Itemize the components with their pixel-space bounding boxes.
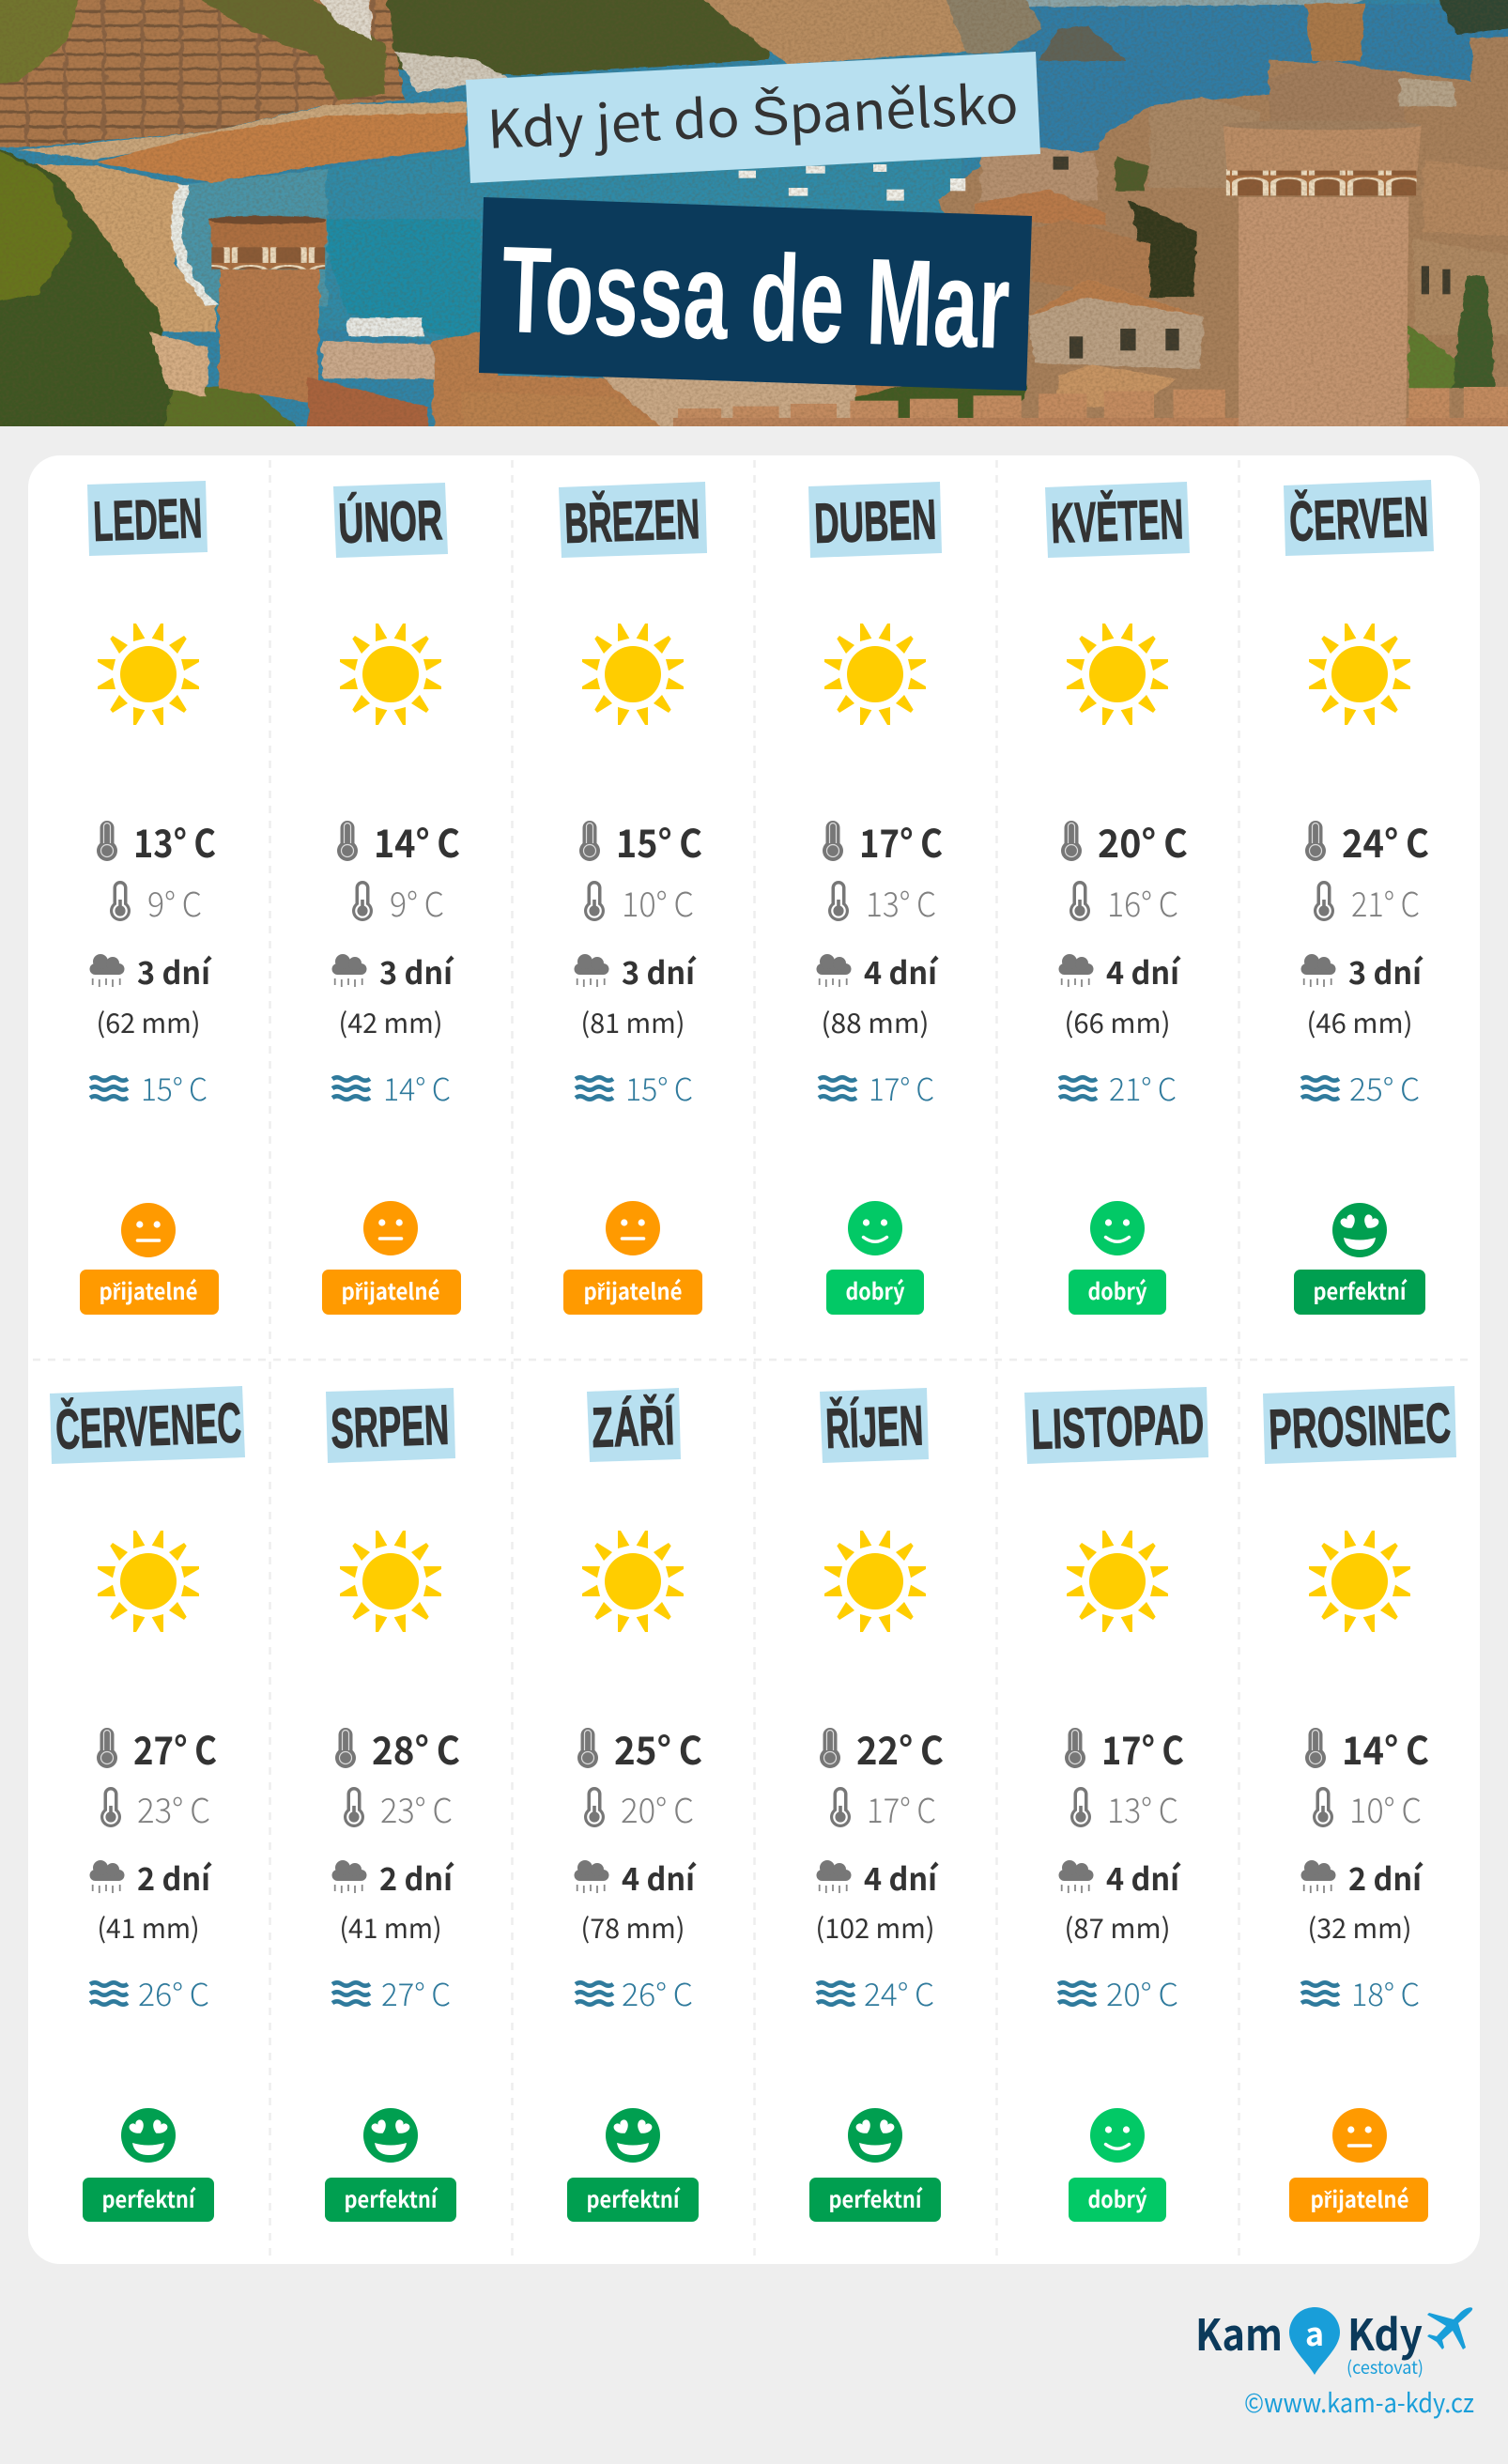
high temperature xyxy=(823,812,943,869)
month: listopad xyxy=(1024,1387,1208,2222)
icon: airplane xyxy=(1427,2307,1472,2349)
rating: dobrý xyxy=(845,1273,905,1306)
rain days: 2 dní xyxy=(1348,1855,1423,1900)
icon: sun xyxy=(1067,624,1168,725)
low temperature: 10° C xyxy=(622,878,694,927)
sea temperature: 14° C xyxy=(383,1065,451,1110)
sea temperature xyxy=(576,1970,693,2015)
rain days xyxy=(332,1855,454,1900)
low temperature xyxy=(584,1784,694,1833)
high temperature: 17° C xyxy=(1101,1719,1184,1776)
rainfall: (87 mm) xyxy=(1065,1907,1170,1947)
month: leden xyxy=(80,481,219,1315)
low temperature: 23° C xyxy=(380,1784,453,1833)
rainfall: (41 mm) xyxy=(340,1907,441,1947)
low temperature xyxy=(584,878,694,927)
sea temperature xyxy=(817,1970,934,2015)
sea temperature: 18° C xyxy=(1351,1970,1420,2015)
rating: perfektní xyxy=(828,2181,923,2214)
rain days xyxy=(1301,948,1423,993)
rainfall: (42 mm) xyxy=(338,1002,443,1041)
month: září xyxy=(567,1388,702,2222)
sea temperature xyxy=(332,1065,451,1110)
rating xyxy=(1069,2108,1166,2222)
rain days: 2 dní xyxy=(379,1855,454,1900)
month title xyxy=(559,482,707,558)
high temperature xyxy=(1305,1719,1429,1776)
rain days: 3 dní xyxy=(137,948,212,993)
month title: LEDEN xyxy=(92,486,203,553)
sea temperature: 15° C xyxy=(141,1065,208,1110)
icon: sun xyxy=(1309,1531,1410,1632)
icon: sun xyxy=(1067,1531,1168,1632)
icon: sun xyxy=(98,624,199,725)
month title xyxy=(808,482,942,558)
rainfall: (102 mm) xyxy=(815,1907,935,1947)
rainfall: (32 mm) xyxy=(1307,1907,1412,1947)
rating xyxy=(1289,2108,1428,2222)
rain days xyxy=(1059,948,1181,993)
rain days xyxy=(332,948,454,993)
rain days xyxy=(90,1855,212,1900)
rainfall: (81 mm) xyxy=(580,1002,685,1041)
logo: Kam a Kdy: (cestovat) xyxy=(1346,2354,1423,2379)
rain days xyxy=(817,1855,939,1900)
month: prosinec xyxy=(1263,1386,1456,2222)
low temperature xyxy=(1314,878,1420,927)
sea temperature xyxy=(90,1970,209,2015)
hero photo of Tossa de Mar xyxy=(0,0,1508,439)
icon: sun xyxy=(824,1531,926,1632)
rainfall: (46 mm) xyxy=(1307,1002,1412,1041)
high temperature xyxy=(579,812,702,869)
icon: sun xyxy=(582,1531,684,1632)
rain days: 4 dní xyxy=(1106,1855,1181,1900)
month: duben xyxy=(808,482,943,1315)
rain days xyxy=(575,1855,697,1900)
rating xyxy=(1294,1203,1425,1315)
rating: přijatelné xyxy=(584,1273,682,1306)
high temperature: 14° C xyxy=(1342,1719,1429,1776)
icon: sun xyxy=(582,624,684,725)
sea temperature xyxy=(1058,1970,1178,2015)
low temperature xyxy=(110,878,202,927)
low temperature: 16° C xyxy=(1107,878,1178,927)
rating xyxy=(826,1201,924,1315)
rain days xyxy=(1059,1855,1181,1900)
low temperature xyxy=(1069,878,1178,927)
icon: sun xyxy=(824,624,926,725)
logo: Kam a Kdy xyxy=(1195,2302,1472,2379)
high temperature xyxy=(1305,812,1429,869)
rainfall: (62 mm) xyxy=(96,1002,201,1041)
low temperature: 9° C xyxy=(390,878,444,927)
month title xyxy=(87,481,208,556)
month: únor xyxy=(322,483,461,1315)
month title: ČERVENEC xyxy=(54,1391,242,1461)
high temperature: 24° C xyxy=(1342,812,1429,869)
high temperature: 17° C xyxy=(859,812,943,869)
sea temperature xyxy=(1301,1065,1420,1110)
sea temperature xyxy=(576,1065,693,1110)
copyright link: ©www.kam-a-kdy.cz xyxy=(1244,2383,1474,2421)
rating: perfektní xyxy=(344,2181,439,2214)
high temperature xyxy=(97,1719,217,1776)
low temperature: 23° C xyxy=(137,1784,210,1833)
icon: sun xyxy=(340,624,441,725)
rain days: 3 dní xyxy=(1348,948,1423,993)
low temperature xyxy=(100,1784,210,1833)
month title: ZÁŘÍ xyxy=(591,1394,676,1459)
month title: LISTOPAD xyxy=(1030,1393,1205,1461)
rating: přijatelné xyxy=(100,1273,197,1306)
rating: perfektní xyxy=(1313,1273,1408,1306)
month title xyxy=(587,1388,681,1462)
rating: přijatelné xyxy=(1311,2181,1408,2214)
low temperature xyxy=(344,1784,453,1833)
rain days: 4 dní xyxy=(622,1855,697,1900)
low temperature: 9° C xyxy=(147,878,202,927)
month title xyxy=(1024,1387,1208,1464)
rating: dobrý xyxy=(1087,2181,1147,2214)
low temperature xyxy=(830,1784,936,1833)
sea temperature: 25° C xyxy=(1349,1065,1420,1110)
icon: sun xyxy=(98,1531,199,1632)
month: březen xyxy=(559,482,707,1315)
rain days xyxy=(817,948,939,993)
low temperature: 13° C xyxy=(1107,1784,1178,1833)
high temperature: 14° C xyxy=(374,812,460,869)
logo: Kam a Kdy: Kam xyxy=(1195,2302,1283,2364)
rating xyxy=(567,2108,699,2222)
month title xyxy=(1045,482,1190,558)
rating xyxy=(563,1201,702,1315)
sea temperature: 26° C xyxy=(138,1970,209,2015)
low temperature: 13° C xyxy=(866,878,936,927)
month title xyxy=(820,1388,929,1463)
rating xyxy=(325,2108,456,2222)
title banner: Tossa de Mar xyxy=(500,220,1012,375)
high temperature: 27° C xyxy=(133,1719,217,1776)
rain days: 3 dní xyxy=(622,948,697,993)
low temperature: 10° C xyxy=(1349,1784,1422,1833)
high temperature: 13° C xyxy=(133,812,216,869)
rating: přijatelné xyxy=(342,1273,439,1306)
rain days xyxy=(1301,1855,1423,1900)
high temperature: 15° C xyxy=(616,812,702,869)
sea temperature xyxy=(819,1065,934,1110)
month title: ÚNOR xyxy=(337,488,443,555)
month title xyxy=(1284,480,1434,556)
rating xyxy=(83,2108,214,2222)
low temperature: 17° C xyxy=(867,1784,936,1833)
rating: perfektní xyxy=(586,2181,681,2214)
high temperature: 28° C xyxy=(372,1719,460,1776)
rainfall: (88 mm) xyxy=(821,1002,930,1041)
month title: ŘÍJEN xyxy=(824,1394,924,1460)
sea temperature xyxy=(90,1065,208,1110)
icon: map pin: a xyxy=(1305,2309,1324,2355)
rating: perfektní xyxy=(101,2181,196,2214)
sea temperature xyxy=(1301,1970,1420,2015)
sea temperature: 15° C xyxy=(625,1065,693,1110)
low temperature xyxy=(828,878,936,927)
month title: SRPEN xyxy=(330,1394,450,1460)
high temperature xyxy=(820,1719,944,1776)
high temperature xyxy=(337,812,460,869)
sea temperature xyxy=(1059,1065,1177,1110)
sea temperature: 20° C xyxy=(1106,1970,1178,2015)
month title: KVĚTEN xyxy=(1050,487,1184,555)
rating: dobrý xyxy=(1087,1273,1147,1306)
rating xyxy=(322,1201,461,1315)
rainfall: (78 mm) xyxy=(580,1907,685,1947)
icon: sun xyxy=(340,1531,441,1632)
subtitle banner: Kdy jet do Španělsko xyxy=(485,62,1020,164)
low temperature xyxy=(1070,1784,1178,1833)
month: srpen xyxy=(325,1388,460,2222)
month: říjen xyxy=(809,1388,944,2222)
rain days: 4 dní xyxy=(1106,948,1181,993)
rainfall: (66 mm) xyxy=(1065,1002,1170,1041)
high temperature xyxy=(1061,812,1188,869)
rating xyxy=(809,2108,941,2222)
low temperature xyxy=(1313,1784,1422,1833)
icon: map pin xyxy=(1289,2307,1340,2375)
month: červenec xyxy=(50,1386,245,2222)
panel: calendar card xyxy=(28,455,1480,2264)
high temperature xyxy=(577,1719,702,1776)
rain days: 2 dní xyxy=(137,1855,212,1900)
sea temperature xyxy=(332,1970,451,2015)
rating xyxy=(80,1203,219,1315)
sea temperature: 27° C xyxy=(381,1970,451,2015)
icon: sun xyxy=(1309,624,1410,725)
title banner xyxy=(479,197,1032,391)
rain days: 3 dní xyxy=(379,948,454,993)
high temperature: 25° C xyxy=(614,1719,702,1776)
sea temperature: 24° C xyxy=(864,1970,934,2015)
rainfall: (41 mm) xyxy=(98,1907,199,1947)
sea temperature: 17° C xyxy=(869,1065,934,1110)
low temperature xyxy=(352,878,444,927)
month title xyxy=(326,1388,455,1463)
high temperature xyxy=(335,1719,460,1776)
rain days: 4 dní xyxy=(864,948,939,993)
month: květen xyxy=(1045,482,1190,1315)
high temperature xyxy=(97,812,216,869)
high temperature: 22° C xyxy=(856,1719,944,1776)
low temperature: 21° C xyxy=(1351,878,1420,927)
rating xyxy=(1069,1201,1166,1315)
high temperature xyxy=(1065,1719,1184,1776)
sea temperature: 21° C xyxy=(1109,1065,1177,1110)
sea temperature: 26° C xyxy=(622,1970,693,2015)
low temperature: 20° C xyxy=(621,1784,694,1833)
month title xyxy=(50,1386,245,1464)
high temperature: 20° C xyxy=(1098,812,1188,869)
logo: Kam a Kdy: Kdy xyxy=(1347,2302,1423,2364)
month title: BŘEZEN xyxy=(563,487,700,555)
month title xyxy=(333,483,448,558)
rain days xyxy=(575,948,697,993)
rain days xyxy=(90,948,212,993)
month: červen xyxy=(1284,480,1434,1315)
rain days: 4 dní xyxy=(864,1855,939,1900)
month title: DUBEN xyxy=(813,487,937,555)
